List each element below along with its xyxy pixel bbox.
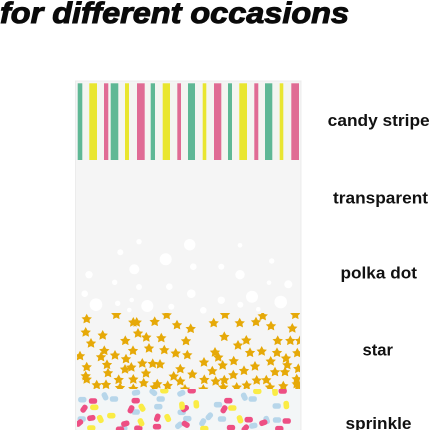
top area of bag: [78, 83, 299, 160]
label: transparent: transparent: [333, 189, 429, 207]
bag body: [76, 81, 301, 430]
polka dot band: [81, 239, 292, 314]
candy stripe band: [78, 83, 299, 160]
label: polka dot: polka dot: [340, 264, 418, 282]
panel: treat bag: [74, 81, 305, 430]
star confetti band: [77, 313, 300, 389]
sprinkle band: [74, 387, 300, 430]
label: star: star: [362, 342, 394, 360]
label: candy stripe: candy stripe: [328, 112, 430, 130]
